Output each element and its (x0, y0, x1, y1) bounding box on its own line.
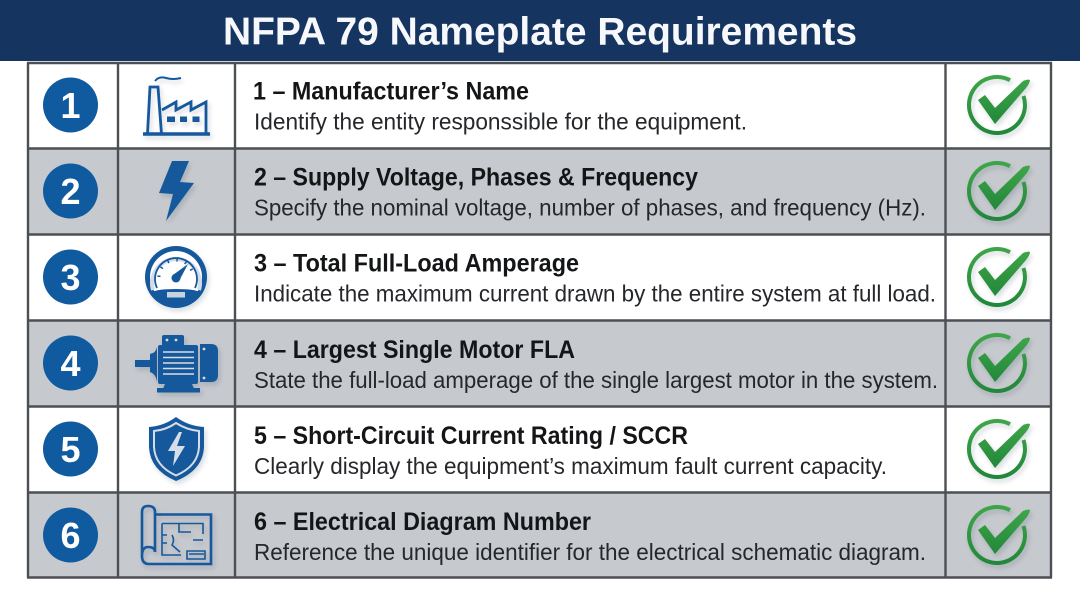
text: motor FLA: 4 – Largest Single Motor FLA (254, 336, 575, 364)
icon: lightning bolt (159, 161, 194, 221)
row 3: total full-load amperage (43, 246, 1030, 308)
text: manufacturer's name (253, 78, 747, 134)
number badge 2 (43, 164, 98, 218)
text: SCCR: 5 – Short-Circuit Current Rating / SCCR (254, 422, 688, 450)
text: SCCR: Clearly display the equipment’s maximum fault current capacity. (254, 453, 887, 479)
number badge 5 (43, 422, 98, 476)
row 5: short-circuit current rating (43, 417, 1030, 481)
icon: factory (143, 77, 210, 134)
row 2: supply voltage (43, 161, 1030, 221)
title banner (0, 0, 1080, 61)
text: amperage: 3 – Total Full-Load Amperage (254, 250, 579, 278)
text: amperage: Indicate the maximum current drawn by the entire system at full load. (254, 280, 936, 306)
text: manufacturer's name: 1 – Manufacturer’s Name (253, 78, 529, 106)
row 6: electrical diagram number (43, 506, 1030, 565)
icon: motor (135, 335, 218, 392)
text: diagram number (254, 508, 926, 565)
text: motor FLA: State the full-load amperage of the single largest motor in the system. (254, 367, 938, 393)
text: supply voltage: 2 – Supply Voltage, Phases & Frequency (254, 164, 698, 192)
number badge 1: 1 (60, 85, 81, 126)
text: supply voltage: Specify the nominal voltage, number of phases, and frequency (Hz). (254, 194, 926, 220)
number badge 1 (43, 78, 98, 132)
check mark 5 (969, 421, 1030, 477)
number badge 5: 5 (60, 429, 81, 470)
check mark 3 (969, 249, 1030, 305)
check mark 2 (969, 163, 1030, 219)
row 4: largest single motor (43, 335, 1030, 393)
text: supply voltage (254, 164, 926, 220)
text: manufacturer's name: Identify the entity responssible for the equipment. (254, 108, 747, 134)
number badge 3: 3 (60, 257, 81, 298)
icon: shield (149, 417, 204, 481)
number badge 6 (43, 508, 98, 562)
number badge 2: 2 (60, 171, 81, 212)
text: motor FLA (254, 336, 938, 393)
check mark 4 (969, 335, 1030, 391)
icon: gauge (145, 246, 207, 308)
number badge 3 (43, 250, 98, 304)
number badge 4 (43, 336, 98, 390)
text: diagram number: 6 – Electrical Diagram Number (254, 508, 591, 536)
check mark 6 (969, 507, 1030, 563)
text: amperage (254, 250, 936, 306)
number badge 4: 4 (60, 343, 81, 384)
text: diagram number: Reference the unique identifier for the electrical schematic diagram. (254, 539, 926, 565)
title: NFPA 79 Nameplate Requirements (223, 10, 857, 54)
number badge 6: 6 (60, 515, 81, 556)
text: SCCR (254, 422, 887, 479)
icon: blueprint (142, 506, 211, 564)
row 1: manufacturer's name (43, 77, 1030, 134)
check mark 1 (969, 77, 1030, 133)
